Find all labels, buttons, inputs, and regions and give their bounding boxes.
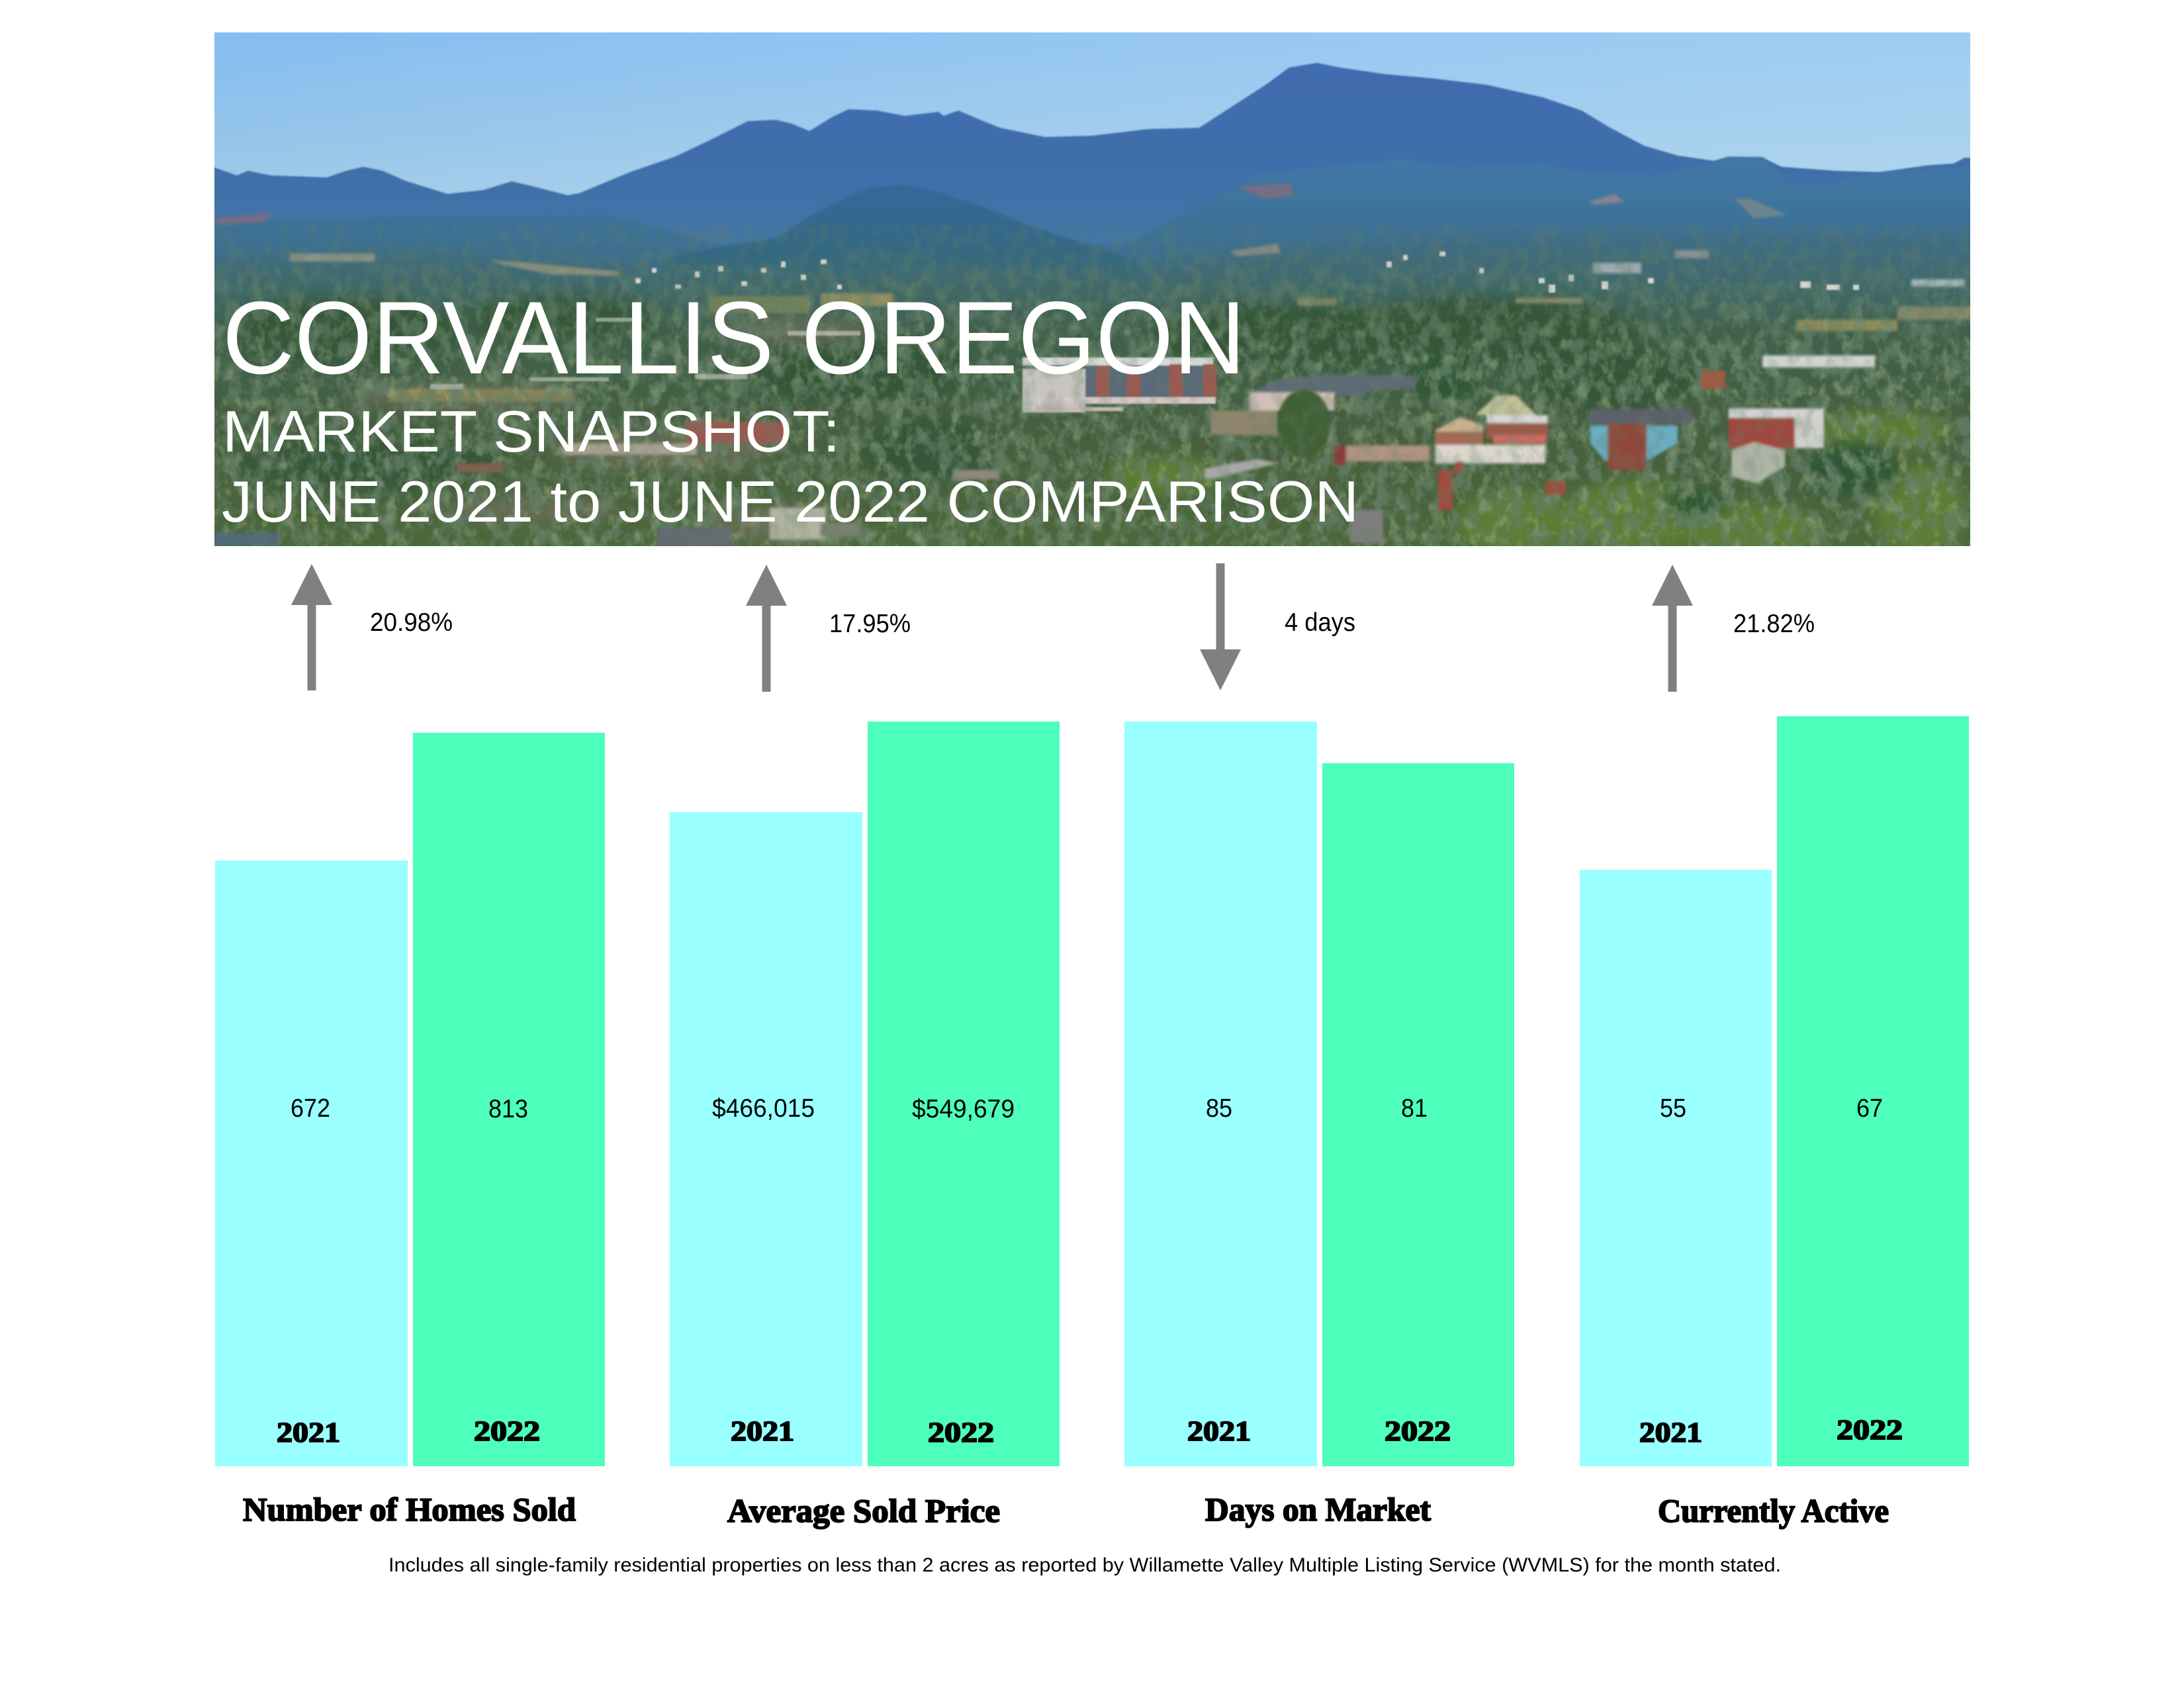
bar 2022: 2022: [928, 1418, 994, 1448]
panel: currently active change: [1652, 565, 1815, 692]
bar 2021: $466,015: [712, 1094, 815, 1123]
arrow up: [746, 565, 787, 692]
campus buildings: [214, 355, 1875, 546]
metric label: Average Sold Price: [727, 1492, 1000, 1529]
round tree in front of campus: [1277, 389, 1330, 458]
arrow up: [291, 564, 332, 690]
foliage texture: [214, 225, 1970, 549]
change value: 17.95%: [829, 610, 911, 638]
dark forest masses: [232, 298, 1701, 490]
bar 2022: [1777, 716, 1969, 1466]
panel: number of homes sold change: [291, 564, 453, 690]
panel: average sold price change: [746, 565, 911, 692]
bar 2022: $549,679: [912, 1095, 1015, 1123]
metric label: Currently Active: [1658, 1492, 1889, 1529]
change value: 20.98%: [370, 608, 453, 637]
bright tree canopy: [1105, 410, 1966, 556]
sky: [214, 32, 1970, 196]
bar 2021: 55: [1660, 1094, 1686, 1123]
scattered houses: [430, 252, 1859, 389]
bar 2022: 2022: [474, 1417, 540, 1447]
metric label: Days on Market: [1205, 1491, 1431, 1528]
bar 2022: 81: [1401, 1094, 1428, 1123]
title: market snapshot line: MARKET SNAPSHOT:: [222, 399, 840, 464]
arrow up: [1652, 565, 1693, 692]
change value: 4 days: [1285, 608, 1355, 637]
bar 2021: [1124, 722, 1317, 1466]
footnote: Includes all single-family residential properties on less than 2 acres as reported by Willamette Valley Multiple Listing Service (WVMLS) for the month stated.: [388, 1554, 1781, 1576]
bar 2021: 672: [291, 1094, 330, 1123]
bar 2021: 2021: [731, 1417, 794, 1447]
bar 2021: 85: [1206, 1094, 1232, 1123]
bar chart: average sold price: [670, 722, 1060, 1529]
title: city name: CORVALLIS OREGON: [222, 281, 1246, 396]
clearings and fields: [214, 183, 1972, 402]
bar 2022: 2022: [1385, 1417, 1451, 1447]
forested foreground hill: [663, 185, 1137, 270]
change value: 21.82%: [1733, 610, 1815, 638]
bar 2022: 67: [1856, 1094, 1883, 1123]
arrow down: [1200, 563, 1241, 690]
bar 2021: [1580, 870, 1772, 1466]
stadium: [1023, 357, 1216, 412]
foliage shading over buildings: [214, 357, 1970, 549]
bar 2021: 2021: [1639, 1418, 1702, 1448]
bar 2021: [215, 861, 408, 1466]
bar 2021: [670, 812, 862, 1466]
bar 2022: [413, 733, 605, 1466]
bar chart: currently active: [1580, 716, 1969, 1529]
dark trees at right: [1410, 354, 1899, 516]
bar 2022: 813: [488, 1095, 528, 1123]
bar chart: number of homes sold: [215, 733, 605, 1528]
bar 2022: [868, 722, 1060, 1466]
middle ridge: [214, 156, 1970, 271]
panel: days on market change: [1200, 563, 1355, 690]
bar 2022: 2022: [1837, 1415, 1903, 1446]
bar 2021: 2021: [277, 1418, 340, 1448]
metric label: Number of Homes Sold: [243, 1491, 576, 1528]
header photo: Corvallis valley and mountains: [172, 32, 2012, 569]
bar chart: days on market: [1124, 722, 1514, 1528]
title: comparison line: JUNE 2021 to JUNE 2022 COMPARISON: [222, 469, 1359, 534]
bar 2022: [1322, 763, 1514, 1466]
warm town haze on the left: [344, 318, 880, 543]
bar 2021: 2021: [1187, 1417, 1251, 1447]
mountain silhouette: [214, 62, 1970, 248]
valley land: [214, 233, 1970, 546]
